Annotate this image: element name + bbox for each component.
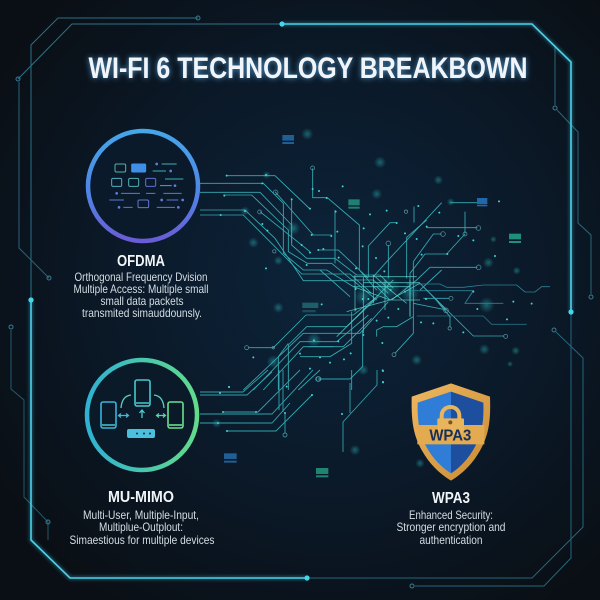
labelled chips <box>224 135 521 477</box>
heading: MU-MIMO: MU-MIMO <box>108 489 174 506</box>
lines into lower-left <box>200 370 377 452</box>
icon: MU-MIMO ring with devices and router <box>87 360 197 470</box>
icon: OFDMA ring and subcarrier grid <box>88 131 198 241</box>
text: WPA3 description: Stronger encryption and <box>396 520 506 534</box>
text: MU-MIMO description: Simaestious for multiple devices <box>70 533 214 547</box>
circuit board network <box>169 128 550 477</box>
text: OFDMA description: small data packets <box>100 294 184 308</box>
heading: OFDMA: OFDMA <box>117 253 165 270</box>
icon: WPA3 shield <box>412 383 490 481</box>
text: WPA3 description <box>396 508 506 547</box>
text: OFDMA description: Orthogonal Frequency Dvision <box>74 270 208 284</box>
text: WPA3 description: Enhanced Security: <box>409 508 493 522</box>
text: MU-MIMO description: Multiplue-Outplout: <box>99 520 183 534</box>
WPA3 panel <box>396 383 506 547</box>
nodes in lower-left <box>218 371 383 437</box>
icon: WPA3 shield: WPA3 <box>429 427 472 444</box>
text: WPA3 description: authentication <box>420 533 482 547</box>
MU-MIMO panel <box>70 360 214 547</box>
OFDMA panel <box>74 131 208 320</box>
text: MU-MIMO description <box>70 508 214 547</box>
text: OFDMA description: Multiple Access: Multiple small <box>74 282 208 296</box>
heading: WPA3: WPA3 <box>432 490 470 507</box>
text: OFDMA description: transmited simauddounsly. <box>82 306 202 320</box>
text: MU-MIMO description: Multi-User, Multiple-Input, <box>83 508 199 522</box>
text: OFDMA description <box>74 270 208 320</box>
